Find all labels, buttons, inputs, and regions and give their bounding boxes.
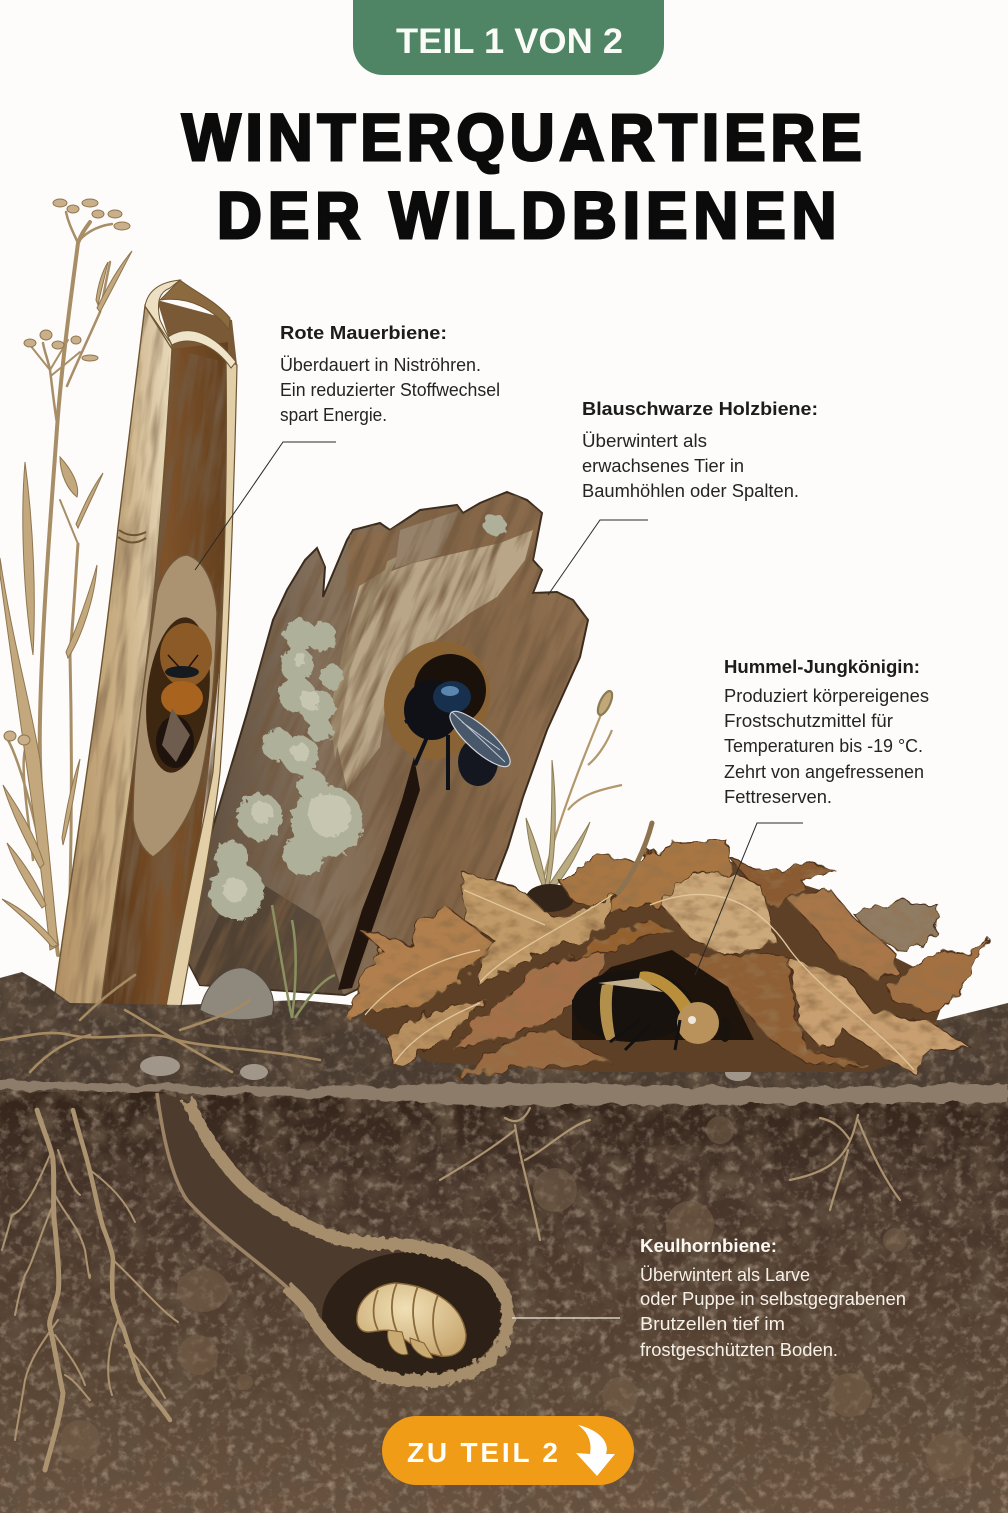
callout: Keulhornbiene: [512, 1235, 906, 1360]
badge: Teil 1 von 2: TEIL 1 VON 2: [396, 22, 623, 61]
title: [182, 100, 862, 252]
callout: Rote Mauerbiene: spart Energie.: [280, 405, 387, 425]
dry grass plants, left: [0, 199, 132, 960]
mud cocoon cell: [133, 555, 217, 857]
title: DER WILDBIENEN: [217, 178, 836, 252]
icon: larva: [357, 1283, 466, 1358]
tree stump: [188, 490, 590, 996]
stones: [140, 968, 751, 1081]
ground litter layer: [0, 972, 1008, 1092]
lichen patches: [209, 514, 506, 920]
oak leaf pile: [347, 823, 989, 1077]
callout: Hummel-Jungkönigin: Frostschutzmittel für: [724, 711, 893, 731]
callout: Hummel-Jungkönigin: [695, 656, 929, 975]
reed nesting tube: [54, 279, 238, 1005]
callout: Keulhornbiene: frostgeschützten Boden.: [640, 1340, 838, 1360]
callout: Keulhornbiene: Überwintert als Larve: [640, 1265, 810, 1285]
button: Zu Teil 2: [382, 1416, 634, 1485]
small twig plant: [526, 689, 622, 888]
callout: Keulhornbiene: Brutzellen tief im: [640, 1314, 785, 1334]
callout: Keulhornbiene: Keulhornbiene:: [640, 1235, 777, 1256]
icon: mason bee in cell: [139, 614, 217, 776]
mud clod with grass: [526, 884, 574, 912]
callout: Blauschwarze Holzbiene: Überwintert als: [582, 431, 707, 451]
roots: [2, 1108, 900, 1470]
soil cross-section: [0, 1092, 1008, 1513]
burrow tunnel and brood cell: [157, 1093, 508, 1381]
ground crust band: [0, 1080, 1008, 1106]
icon: carpenter bee: [404, 680, 517, 790]
callout: Hummel-Jungkönigin: Hummel-Jungkönigin:: [724, 656, 920, 677]
callout: Hummel-Jungkönigin: Produziert körpereigenes: [724, 686, 929, 706]
green grass tuft: [272, 905, 335, 1018]
callout: Hummel-Jungkönigin: Zehrt von angefressenen: [724, 762, 924, 782]
button: Zu Teil 2: ZU TEIL 2: [407, 1437, 558, 1468]
title: WINTERQUARTIERE: [182, 100, 862, 174]
tree hollow: [368, 626, 506, 774]
badge: Teil 1 von 2: [353, 0, 664, 75]
callout: Rote Mauerbiene: Ein reduzierter Stoffwechsel: [280, 380, 500, 400]
callout: Rote Mauerbiene: [195, 322, 500, 570]
icon: down arrow: [576, 1425, 615, 1476]
callout: Hummel-Jungkönigin: Temperaturen bis -19 °C.: [724, 736, 923, 756]
twigs on ground: [0, 975, 320, 1072]
callout: Blauschwarze Holzbiene: erwachsenes Tier in: [582, 456, 744, 476]
callout: Blauschwarze Holzbiene: [548, 398, 818, 595]
leaf veins and stick: [365, 890, 914, 1070]
callout: Hummel-Jungkönigin: Fettreserven.: [724, 787, 832, 807]
callout: Rote Mauerbiene: Überdauert in Niströhren.: [280, 355, 481, 375]
callout: Blauschwarze Holzbiene: Baumhöhlen oder Spalten.: [582, 481, 799, 501]
leaf cave: [572, 950, 754, 1040]
callout: Keulhornbiene: oder Puppe in selbstgegrabenen: [640, 1289, 906, 1309]
callout: Rote Mauerbiene: Rote Mauerbiene:: [280, 322, 447, 343]
callout: Blauschwarze Holzbiene: Blauschwarze Holzbiene:: [582, 398, 818, 419]
icon: bumblebee queen: [572, 970, 731, 1050]
